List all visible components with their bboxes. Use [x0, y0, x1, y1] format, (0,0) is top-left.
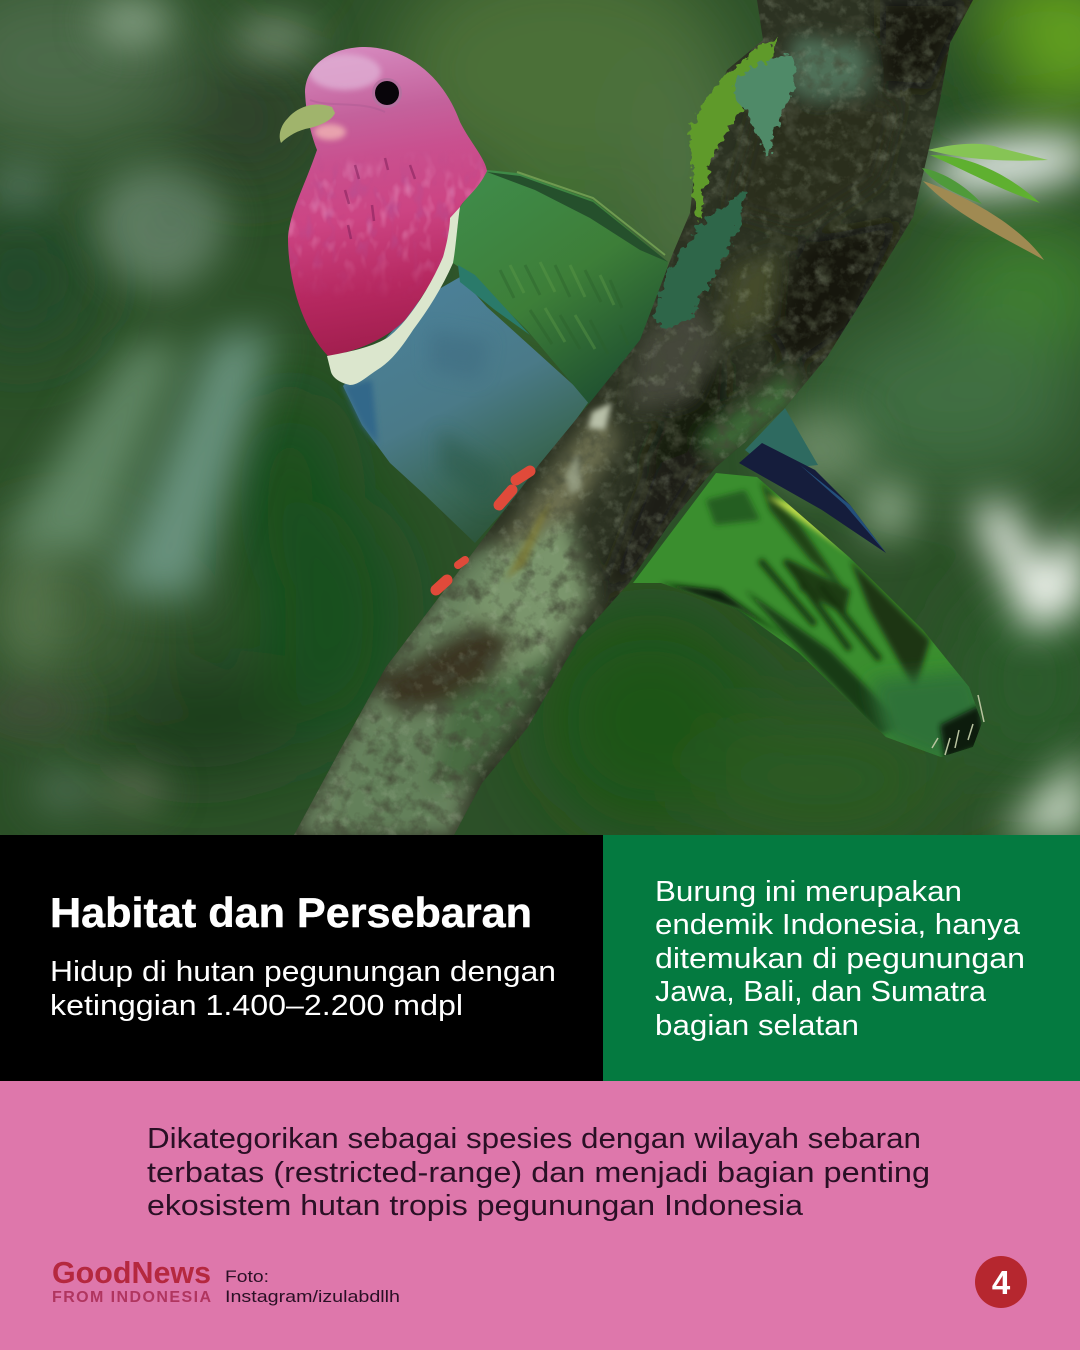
text block: altitude: Hidup di hutan pegunungan dengan: [50, 956, 556, 988]
tail tip feather barbs: [932, 695, 984, 755]
panel: black title box: [0, 835, 603, 1082]
text block: endemic description: bagian selatan: [655, 1010, 859, 1042]
bird pink head and breast: [285, 47, 490, 356]
moss and lichen on branch: [655, 38, 796, 330]
text block: restricted range: terbatas (restricted-range) dan menjadi bagian penting: [147, 1157, 930, 1189]
panel: photo of pink-headed fruit dove on a mossy branch: [0, 0, 1080, 850]
heading: Habitat dan Persebaran: [50, 889, 532, 936]
bird green wing: [453, 170, 668, 405]
photo credit: Foto:: [225, 1267, 269, 1286]
text block: altitude: [50, 956, 556, 1022]
bird dark flight feathers: [739, 408, 886, 553]
text block: endemic description: [655, 876, 1025, 1042]
mossy branch: [294, 0, 973, 835]
text block: altitude: ketinggian 1.400–2.200 mdpl: [50, 990, 463, 1022]
blurred forest background: [0, 0, 1080, 850]
panel: pink footer: [0, 1081, 1080, 1350]
photo credit: [225, 1267, 400, 1306]
text block: restricted range: ekosistem hutan tropis pegunungan Indonesia: [147, 1190, 804, 1222]
text block: restricted range: Dikategorikan sebagai spesies dengan wilayah sebaran: [147, 1123, 921, 1155]
logo: GoodNews from Indonesia: GoodNews: [52, 1255, 211, 1290]
logo: GoodNews from Indonesia: FROM INDONESIA: [52, 1289, 211, 1306]
bird red feet: [436, 471, 530, 590]
text block: restricted range: [147, 1123, 930, 1222]
panel: green endemic text box: [603, 835, 1080, 1082]
text block: endemic description: ditemukan di pegunungan: [655, 943, 1025, 975]
bird eye: [372, 78, 402, 108]
text block: endemic description: endemik Indonesia, hanya: [655, 909, 1021, 941]
page number badge: [975, 1256, 1027, 1308]
text block: endemic description: Jawa, Bali, dan Sumatra: [655, 976, 987, 1008]
bird beak: [280, 104, 335, 143]
bark highlights on branch: [505, 402, 612, 580]
bird tail: [633, 473, 990, 765]
page number badge: 4: [992, 1264, 1011, 1301]
text block: endemic description: Burung ini merupakan: [655, 876, 962, 908]
logo: GoodNews from Indonesia: [52, 1255, 211, 1306]
bird blue belly: [343, 277, 590, 543]
leaves: [922, 144, 1048, 260]
bird white collar: [327, 207, 460, 385]
photo credit: Instagram/izulabdllh: [225, 1287, 400, 1306]
